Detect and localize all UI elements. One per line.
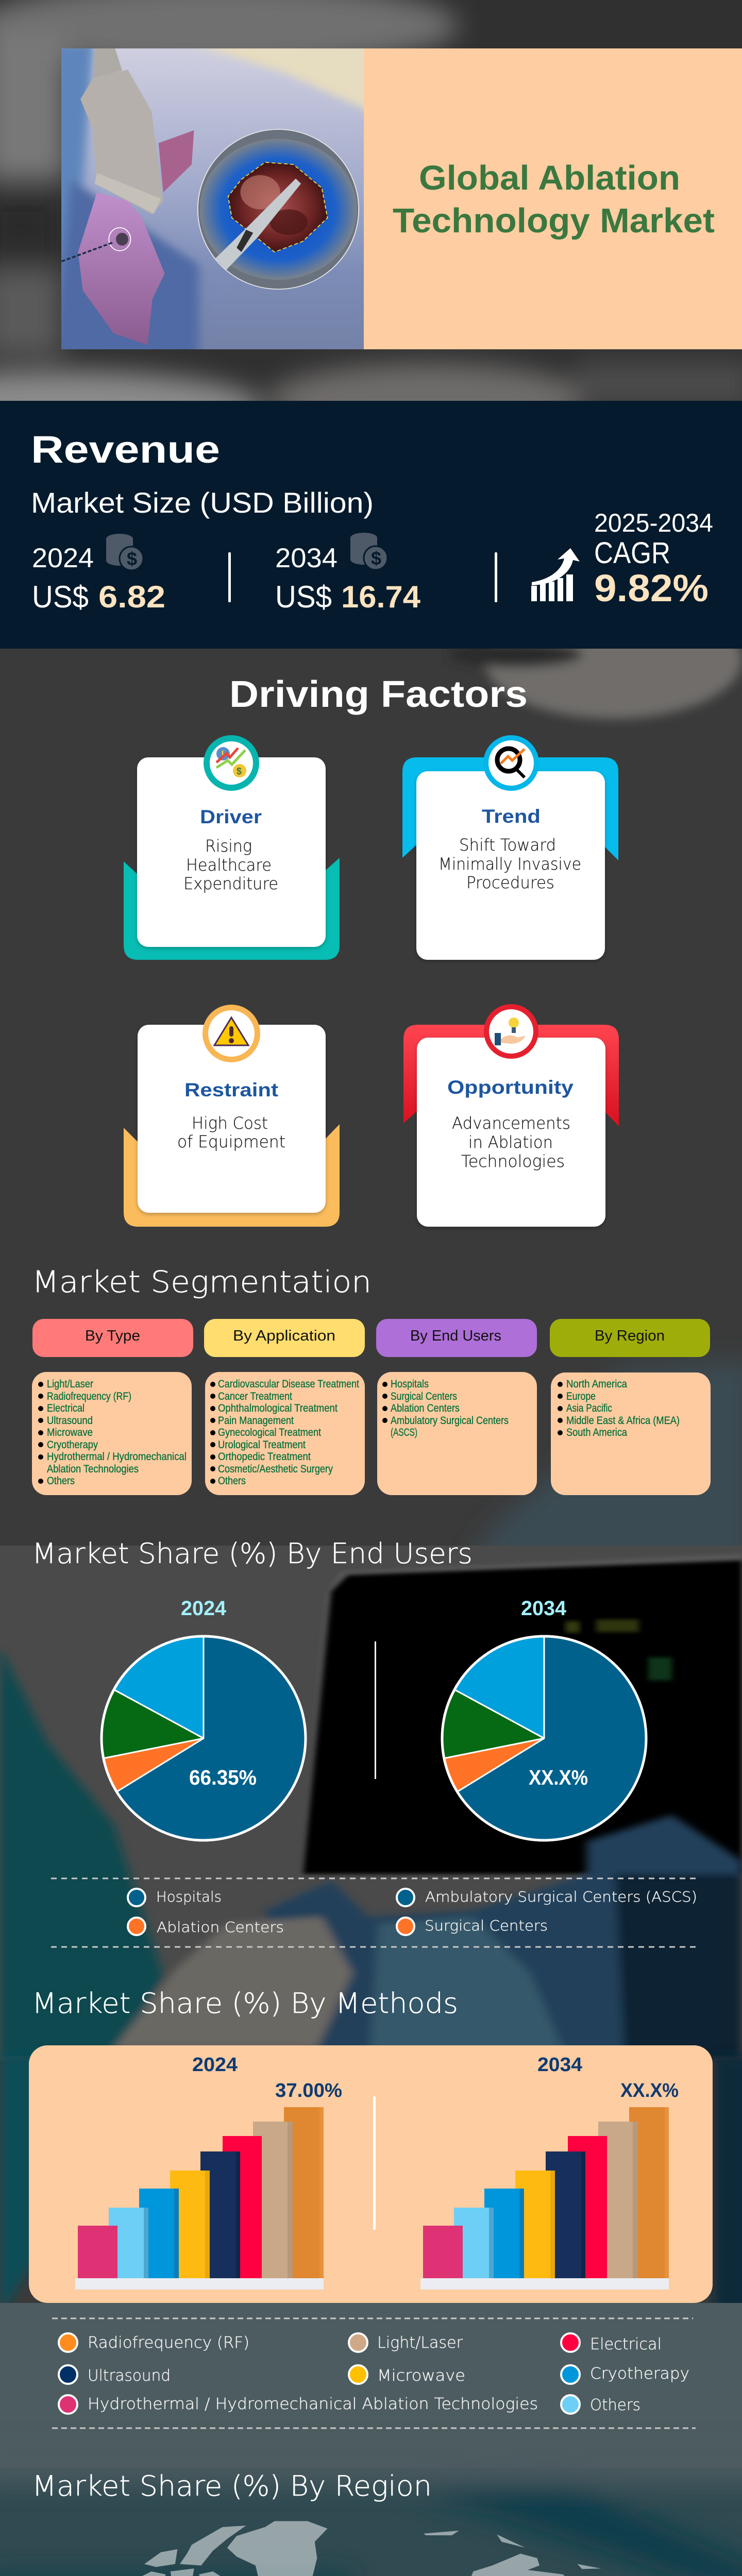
- panel: type list: Ultrasound: [47, 1415, 93, 1427]
- legend: methods: Electrical: [590, 2335, 662, 2353]
- stat: CAGR: CAGR: [594, 536, 670, 570]
- bar chart 2024: [75, 2107, 324, 2290]
- text: driver detail: Rising: [205, 836, 252, 856]
- segment header: by region: By Region: [595, 1328, 665, 1344]
- panel: type list: Radiofrequency (RF): [47, 1391, 131, 1402]
- icon: trend magnifier: [483, 735, 539, 791]
- panel: application list: Cosmetic/Aesthetic Surgery: [218, 1463, 333, 1475]
- text: opportunity detail: Technologies: [461, 1151, 565, 1171]
- card: trend: [402, 735, 618, 960]
- panel: application list: Orthopedic Treatment: [218, 1451, 311, 1463]
- title: [393, 159, 715, 240]
- text: trend detail: [439, 835, 581, 892]
- heading: driver: Driver: [200, 806, 262, 827]
- panel: application list: Urological Treatment: [218, 1439, 306, 1451]
- icon: growth chart: [531, 548, 580, 601]
- hero illustration: ablation probe and tumour: [61, 48, 364, 349]
- icon: coins 2024: [106, 534, 143, 570]
- panel: end users list: Hospitals: [391, 1378, 429, 1390]
- stat: 2024 revenue: US$: [32, 580, 89, 614]
- text: driver detail: Expenditure: [183, 874, 278, 893]
- title: Global Ablation: [419, 159, 680, 197]
- divider: [375, 1641, 376, 1779]
- title: Technology Market: [393, 201, 715, 240]
- world map: [71, 2521, 667, 2576]
- text: trend detail: Shift Toward: [459, 835, 556, 855]
- segment header: by region: [550, 1319, 710, 1357]
- text: restraint detail: [177, 1113, 285, 1151]
- segment header: by application: By Application: [233, 1328, 335, 1344]
- heading: market share by methods: Market Share (%) By Methods: [32, 1987, 458, 2020]
- divider: [228, 552, 231, 602]
- panel: region list: [551, 1372, 711, 1495]
- card: restraint: [124, 1005, 340, 1227]
- text: trend detail: Procedures: [466, 873, 554, 892]
- divider: [373, 2096, 376, 2230]
- legend: methods: Light/Laser: [377, 2334, 463, 2352]
- segment header: by application: [204, 1319, 365, 1357]
- stat: 2024 revenue: 6.82: [98, 580, 165, 614]
- panel: end users list: Ablation Centers: [391, 1402, 460, 1414]
- label: 2034: 2034: [537, 2054, 582, 2076]
- label: pie 2034 year: 2034: [521, 1597, 567, 1620]
- heading: opportunity: Opportunity: [447, 1077, 574, 1098]
- panel: end users list: Ambulatory Surgical Centers: [391, 1415, 509, 1427]
- panel: application list: Cardiovascular Disease Treatment: [218, 1378, 359, 1390]
- value: XX.X%: XX.X%: [529, 1766, 588, 1789]
- panel: revenue band: [0, 401, 742, 649]
- panel: type list: Cryotherapy: [47, 1439, 98, 1451]
- segment header: by type: By Type: [85, 1328, 140, 1344]
- legend: methods: Microwave: [377, 2367, 465, 2385]
- text: restraint detail: of Equipment: [177, 1132, 285, 1151]
- legend: methods: Radiofrequency (RF): [88, 2334, 249, 2352]
- panel: region list: Middle East & Africa (MEA): [566, 1415, 680, 1427]
- value: XX.X%: XX.X%: [620, 2080, 679, 2102]
- text: opportunity detail: in Ablation: [468, 1132, 553, 1152]
- panel: type list: Electrical: [47, 1402, 85, 1414]
- panel: region list: Asia Pacific: [566, 1402, 612, 1414]
- text: opportunity detail: Advancements: [452, 1113, 570, 1133]
- pie chart 2034: [442, 1636, 646, 1841]
- panel: type list: Ablation Technologies: [47, 1463, 139, 1475]
- text: restraint detail: High Cost: [192, 1113, 268, 1133]
- heading: trend: Trend: [482, 806, 541, 827]
- legend: end users: [51, 1878, 697, 1947]
- bar chart 2034: [420, 2107, 669, 2290]
- label: pie 2024 year: 2024: [181, 1597, 227, 1620]
- panel: type list: Hydrothermal / Hydromechanical: [47, 1451, 187, 1463]
- panel: application list: [205, 1372, 365, 1495]
- text: trend detail: Minimally Invasive: [439, 854, 581, 874]
- stat: 2034 revenue: 2034: [275, 543, 338, 573]
- stat: CAGR: 9.82%: [594, 567, 709, 609]
- panel: end users list: (ASCS): [391, 1427, 417, 1438]
- panel: type list: Microwave: [47, 1427, 93, 1438]
- heading: market share by end users: Market Share (%) By End Users: [32, 1537, 473, 1570]
- icon: coins 2024: $: [127, 548, 137, 569]
- segment header: by type: [32, 1319, 193, 1357]
- card: opportunity: [403, 1004, 619, 1227]
- icon: coins 2034: [350, 533, 387, 570]
- panel: type list: Light/Laser: [47, 1378, 93, 1390]
- icon: coins 2034: $: [371, 548, 381, 569]
- heading: driving factors: Driving Factors: [229, 674, 528, 715]
- stat: 2034 revenue: US$: [275, 580, 332, 614]
- legend: end users: Hospitals: [156, 1888, 222, 1905]
- card: driver: [124, 735, 340, 960]
- panel: region list: South America: [566, 1427, 627, 1438]
- stat: 2034 revenue: 16.74: [341, 580, 421, 614]
- legend: methods: Hydrothermal / Hydromechanical Ablation Technologies: [88, 2395, 538, 2413]
- title panel: [364, 48, 742, 349]
- text: driver detail: [183, 836, 278, 893]
- legend: end users: Surgical Centers: [425, 1917, 548, 1934]
- icon: restraint warning: [203, 1005, 260, 1062]
- panel: region list: North America: [566, 1378, 627, 1390]
- stat: 2034 revenue: [275, 543, 421, 614]
- panel: type list: Others: [47, 1475, 75, 1487]
- stat: 2024 revenue: [32, 543, 165, 614]
- panel: application list: Cancer Treatment: [218, 1391, 292, 1402]
- icon: driver gears and arrows: $: [237, 766, 242, 776]
- segment header: by end users: [376, 1319, 537, 1357]
- segment header: by end users: By End Users: [410, 1328, 501, 1344]
- legend: methods: Cryotherapy: [590, 2365, 689, 2383]
- heading: restraint: Restraint: [184, 1079, 278, 1100]
- legend: methods: Others: [590, 2396, 640, 2414]
- text: market size: Market Size (USD Billion): [31, 486, 374, 519]
- pie chart 2024: [102, 1636, 306, 1841]
- legend: end users: Ablation Centers: [157, 1919, 284, 1936]
- divider: [495, 552, 497, 602]
- panel: application list: Ophthalmological Treatment: [218, 1402, 338, 1414]
- text: opportunity detail: [452, 1113, 570, 1171]
- heading: market share by region: Market Share (%) By Region: [32, 2470, 432, 2502]
- heading: market segmentation: Market Segmentation: [32, 1264, 372, 1299]
- icon: opportunity bulb in hand: [484, 1004, 538, 1059]
- icon: driver gears and arrows: [204, 735, 259, 791]
- stat: 2024 revenue: 2024: [32, 543, 94, 573]
- text: driver detail: Healthcare: [186, 855, 272, 875]
- panel: application list: Gynecological Treatment: [218, 1427, 321, 1438]
- panel: end users list: Surgical Centers: [391, 1391, 457, 1402]
- stat: CAGR: [594, 509, 713, 609]
- legend: methods: Ultrasound: [88, 2367, 171, 2385]
- panel: type list: [32, 1372, 192, 1495]
- label: 2024: 2024: [192, 2054, 238, 2076]
- panel: methods bar charts: [29, 2045, 713, 2303]
- icon: driver gears and arrows: !: [221, 749, 224, 759]
- panel: end users list: [377, 1372, 537, 1495]
- panel: region list: Europe: [566, 1391, 596, 1402]
- value: 66.35%: 66.35%: [189, 1766, 257, 1789]
- panel: application list: Pain Management: [218, 1415, 294, 1427]
- value: 37.00%: 37.00%: [275, 2080, 342, 2102]
- legend: methods: [52, 2318, 696, 2428]
- panel: application list: Others: [218, 1475, 246, 1487]
- stat: CAGR: 2025-2034: [594, 509, 713, 537]
- heading: revenue: Revenue: [31, 428, 220, 471]
- legend: end users: Ambulatory Surgical Centers (ASCS): [425, 1888, 697, 1905]
